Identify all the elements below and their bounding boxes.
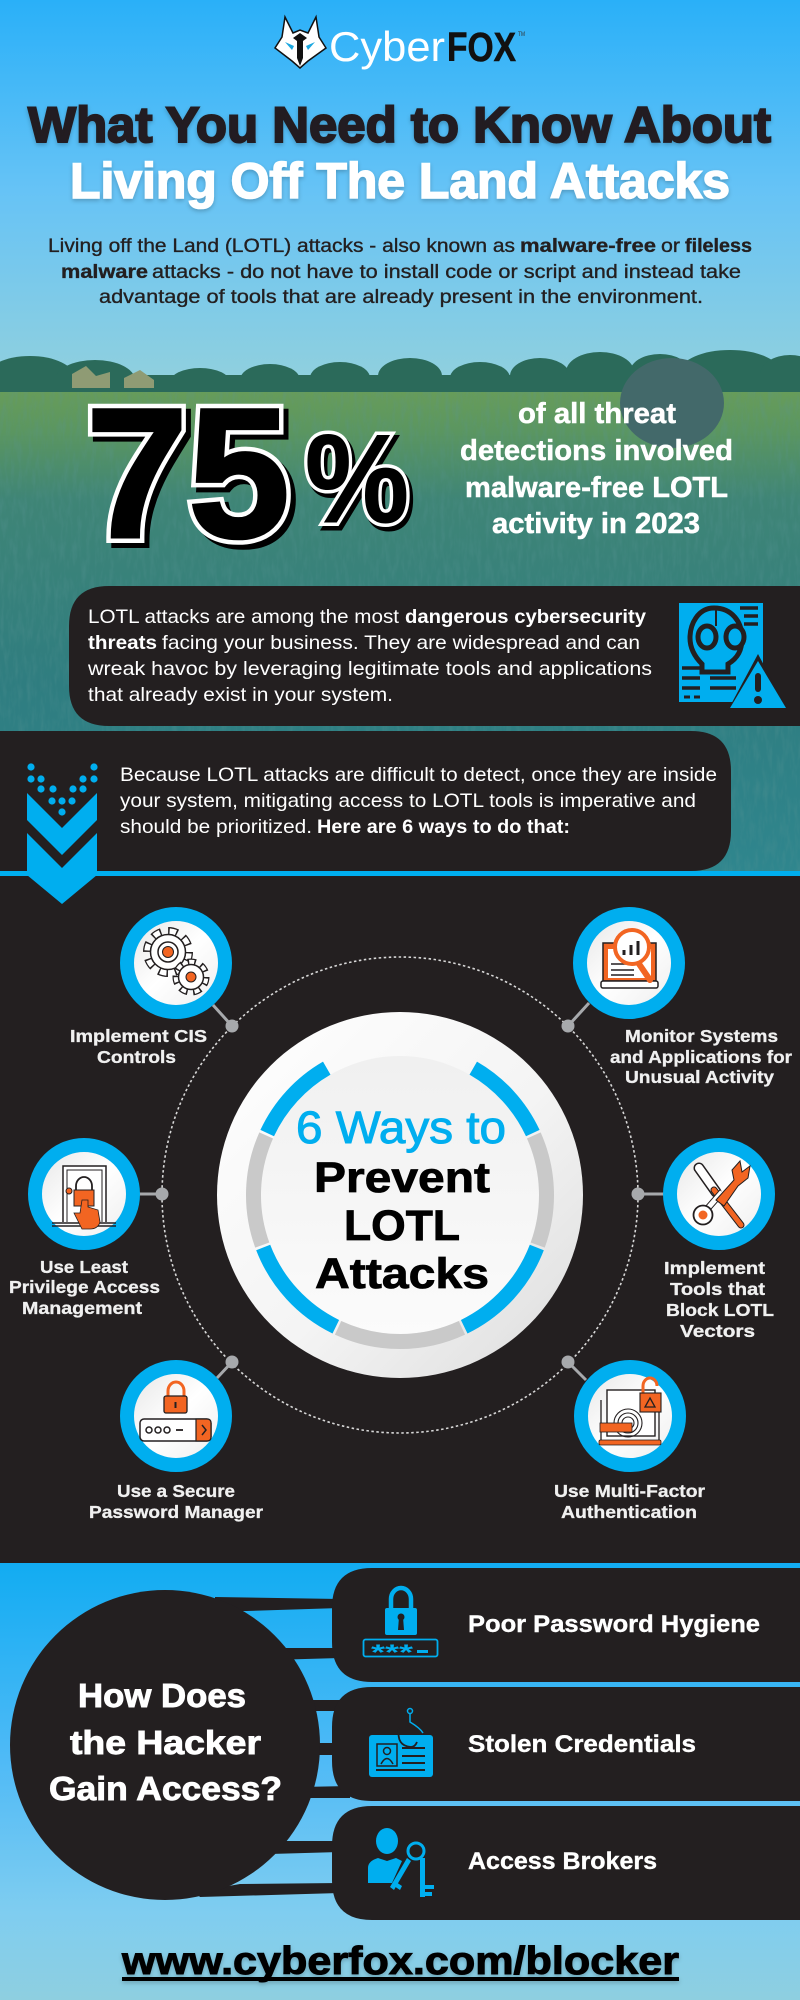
stat text: malware-free LOTL	[465, 472, 728, 504]
panel text: that already exist in your system.	[88, 684, 393, 706]
big number: 75%: 75	[86, 371, 290, 577]
panel text	[87, 606, 652, 706]
intro paragraph: fileless	[685, 235, 752, 257]
item: Tools that Block	[664, 1145, 774, 1341]
item: Monitor Systems: Monitor Systems	[625, 1026, 778, 1046]
item: Tools that Block: Block LOTL	[666, 1300, 774, 1320]
center disc: 6 Ways to Prevent LOTL Attacks: Attacks	[315, 1250, 489, 1298]
intro paragraph: or	[661, 235, 681, 257]
icon: wrench and screwdriver	[694, 1161, 750, 1225]
item: Implement CIS Controls: Controls	[97, 1047, 176, 1067]
item: Monitor Systems	[580, 914, 792, 1087]
item: Least Privilege: Privilege Access	[9, 1277, 160, 1297]
item: Secure Password Manager: Password Manager	[89, 1502, 263, 1522]
bottom section background	[0, 1563, 800, 2000]
icon: fox head	[275, 17, 326, 68]
background: sky	[0, 0, 800, 380]
big number: 75%	[86, 371, 412, 582]
panel: LOTL danger	[69, 586, 800, 726]
panel: Stolen Credentials: Stolen Credentials	[468, 1731, 696, 1758]
intro paragraph: malware	[61, 261, 148, 283]
circle: How Does the Hacker Gain Access?: the Hacker	[70, 1724, 261, 1761]
panel: Stolen Credentials	[332, 1687, 800, 1801]
icon: ID card with hook	[369, 1708, 433, 1777]
logo: CyberFOX: FOX	[447, 24, 516, 70]
circle: How Does the Hacker Gain Access?	[10, 1590, 320, 1900]
panel: mitigation: Because LOTL attacks are difficult to detect, once they are inside	[120, 764, 717, 786]
panel text: threats	[88, 632, 157, 654]
panel: Poor Password Hygiene	[332, 1568, 800, 1682]
center disc: 6 Ways to Prevent LOTL Attacks: 6 Ways to	[296, 1102, 506, 1153]
intro paragraph	[48, 235, 752, 308]
title: What You Need to Know About	[28, 97, 771, 153]
logo: CyberFOX	[275, 17, 525, 70]
intro paragraph: malware-free	[520, 235, 656, 257]
logo: CyberFOX: TM	[518, 32, 525, 38]
panel text: LOTL attacks are among the most	[88, 606, 400, 628]
panel: Poor Password Hygiene: Poor Password Hygiene	[468, 1611, 760, 1638]
item: Tools that Block: Vectors	[680, 1321, 755, 1341]
icon: person and keys	[368, 1828, 434, 1897]
item: Secure Password Manager: Use a Secure	[117, 1481, 235, 1501]
stat text	[460, 398, 733, 540]
stat text: of all threat	[518, 398, 677, 430]
connectors	[138, 1003, 664, 1380]
big number: 75%: 75	[86, 371, 290, 577]
center disc: 6 Ways to Prevent LOTL Attacks: Prevent	[314, 1154, 490, 1202]
item: Multi-Factor Authentication: Use Multi-Factor	[554, 1481, 705, 1501]
item: Implement CIS Controls: Implement CIS	[70, 1026, 207, 1046]
title: Living Off The Land Attacks	[70, 153, 730, 209]
icon: lock with password: ***	[371, 1640, 414, 1665]
big number: 75%: 75	[91, 376, 295, 582]
dotted orbit ring	[162, 957, 638, 1433]
stat text: detections involved	[460, 435, 733, 467]
intro paragraph: attacks - do not have to install code or script and instead take	[152, 261, 741, 283]
stat text: activity in 2023	[492, 508, 700, 540]
icon: door with fingerprint lock and hand	[52, 1166, 116, 1229]
title	[28, 97, 771, 209]
item: Multi-Factor Authentication	[554, 1367, 705, 1522]
icon: lock and password bar	[140, 1382, 211, 1441]
website link: www.cyberfox.com/blocker	[121, 1940, 679, 1983]
item: Monitor Systems: and Applications for	[610, 1047, 792, 1067]
photo: grass field with trees and hay bale	[0, 350, 800, 878]
panel: Access Brokers	[332, 1806, 800, 1920]
icon: lock with password	[364, 1588, 438, 1665]
big number: 75%: %	[308, 414, 412, 553]
panel text: facing your business. They are widespread and can	[162, 632, 640, 654]
ring segments	[253, 1068, 547, 1342]
center disc: 6 Ways to Prevent LOTL Attacks	[217, 1012, 583, 1378]
big number: 75%: %	[305, 410, 409, 549]
icon: magnifier on laptop	[601, 930, 658, 988]
panel: Access Brokers: Access Brokers	[468, 1848, 657, 1875]
panel text: dangerous cybersecurity	[405, 606, 646, 628]
panel: mitigation	[0, 731, 731, 871]
divider line	[0, 871, 800, 876]
item: Tools that Block: Tools that	[670, 1279, 765, 1299]
icon: gears	[147, 931, 206, 992]
logo: CyberFOX: Cyber	[329, 23, 445, 70]
panel: mitigation: Here are 6 ways to do that:	[317, 816, 570, 838]
item: Tools that Block: Implement	[664, 1258, 765, 1278]
dark section background	[0, 876, 800, 1564]
connector bands	[195, 1597, 350, 1897]
item: Implement CIS Controls	[70, 914, 225, 1067]
panel text: wreak havoc by leveraging legitimate tools and applications	[87, 658, 652, 680]
circle: How Does the Hacker Gain Access?: Gain Access?	[49, 1770, 282, 1807]
intro paragraph: Living off the Land (LOTL) attacks - also known as	[48, 235, 515, 257]
circle: How Does the Hacker Gain Access?: How Does	[78, 1677, 246, 1714]
item: Least Privilege: Management	[22, 1298, 142, 1318]
item: Monitor Systems: Unusual Activity	[625, 1067, 774, 1087]
center disc: 6 Ways to Prevent LOTL Attacks: LOTL	[344, 1202, 460, 1250]
item: Least Privilege: Use Least	[40, 1257, 128, 1277]
panel: mitigation: should be prioritized.	[120, 816, 312, 838]
item: Multi-Factor Authentication: Authentication	[561, 1502, 697, 1522]
item: Least Privilege	[9, 1145, 160, 1318]
intro paragraph: advantage of tools that are already present in the environment.	[99, 286, 703, 308]
panel: mitigation: your system, mitigating access to LOTL tools is imperative and	[120, 790, 696, 812]
icon: downward chevrons with dots	[27, 763, 98, 904]
big number: 75%: %	[305, 410, 409, 549]
icon: skull server with warning	[679, 603, 788, 710]
icon: fingerprint and padlock on device	[599, 1378, 661, 1445]
item: Secure Password Manager	[89, 1367, 263, 1522]
